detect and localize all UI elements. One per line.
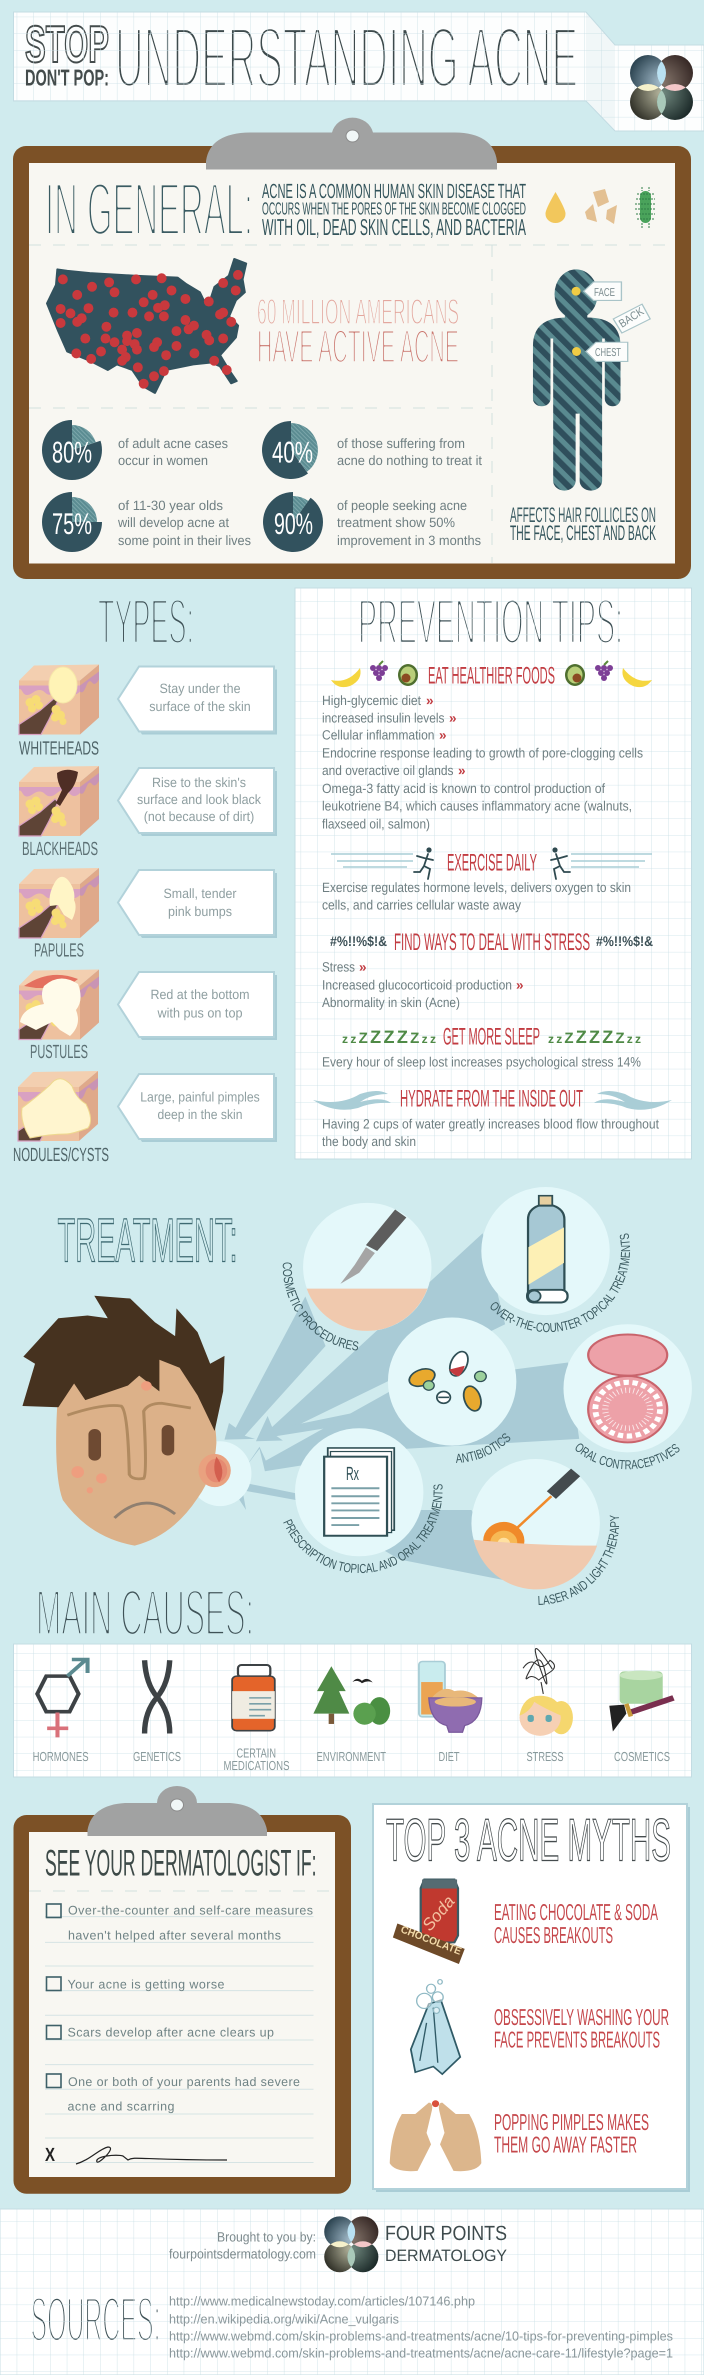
icon: banana right [622, 668, 652, 687]
type: pustules [19, 970, 99, 1063]
stat text: 90%: of people seeking acne [337, 498, 467, 513]
curved label: laser: LASER AND LIGHT THERAPY [538, 1515, 620, 1605]
stat pie: 80% [42, 420, 102, 480]
tip text: diet: and overactive oil glands [322, 763, 454, 778]
wave left [313, 1091, 391, 1110]
stat text: 75%: of 11-30 year olds [118, 498, 223, 513]
tip text: exercise: cells, and carries cellular waste away [322, 898, 521, 912]
icon: chocolate bar [393, 1923, 465, 1964]
source urls: http://www.webmd.com/skin-problems-and-treatments/acne/10-tips-for-preventing-pimples [169, 2328, 673, 2344]
title: stop: STOP [25, 16, 109, 74]
stat text: 75%: some point in their lives [118, 533, 251, 548]
callout: nodules/cysts [118, 1074, 277, 1142]
tip text: diet: » [426, 693, 434, 708]
type: papules: PAPULES [34, 940, 84, 962]
stat text: 90% [337, 498, 481, 548]
checklist text: acne and scarring [68, 2100, 175, 2114]
panel: in general clipboard: IN GENERAL: [45, 167, 253, 251]
clipboard clip [206, 118, 497, 170]
ruled lines [45, 1917, 314, 2162]
stat pie: 90%: 90% [274, 508, 313, 541]
callout: blackheads: surface and look black [137, 792, 261, 807]
dividers [29, 245, 675, 563]
icon: soda can [421, 1879, 458, 1942]
icon: environment [313, 1666, 390, 1725]
stat pie: 75%: 75% [52, 508, 92, 541]
stat text: 90%: improvement in 3 months [337, 533, 481, 548]
type: whiteheads [19, 664, 99, 760]
stat text: 80%: occur in women [118, 453, 208, 468]
tip text: diet: High-glycemic diet [322, 693, 421, 708]
stat text: 40% [337, 436, 482, 468]
type: whiteheads: WHITEHEADS [19, 738, 99, 760]
myth icons [390, 1879, 481, 2171]
figure: striped person [533, 269, 650, 491]
circle: prescription [295, 1428, 423, 1556]
icon: runner head left [426, 847, 432, 853]
icon: avocado left [398, 664, 418, 686]
stat text: 80%: of adult acne cases [118, 436, 228, 451]
icon: runner right [551, 854, 570, 879]
icon: genetics [145, 1660, 170, 1733]
icon: towel with bubbles [411, 1980, 460, 2074]
icon: hormones [37, 1660, 88, 1737]
type: nodules/cysts: NODULES/CYSTS [13, 1145, 109, 1166]
brand name: FOUR POINTS [385, 2222, 507, 2245]
icon: banana left [331, 668, 361, 687]
callout: pustules: with pus on top [157, 1006, 242, 1020]
text: TREATMENT: [58, 1207, 238, 1276]
stat pie: 40% [262, 421, 318, 479]
tip text: diet: » [439, 728, 447, 742]
credit text [169, 2230, 316, 2262]
callout: pustules: Red at the bottom [150, 987, 250, 1002]
stat pie: 80%: 80% [52, 436, 92, 470]
callout: blackheads: (not because of dirt) [144, 809, 254, 824]
signature: X [45, 2145, 55, 2166]
checklist text: Over-the-counter and self-care measures [68, 1904, 313, 1918]
icon: avocado right [565, 664, 585, 686]
circle: laser [471, 1459, 600, 1589]
curved label: oral contraceptives: ORAL CONTRACEPTIVES [576, 1444, 680, 1470]
curved label: cosmetic procedures: COSMETIC PROCEDURES [282, 1262, 358, 1350]
stat text: 75%: will develop acne at [117, 515, 229, 530]
header ribbon [14, 10, 704, 131]
logo: four points footer [324, 2216, 378, 2272]
panel: prevention tips: EXERCISE DAILY [447, 849, 537, 876]
tip text: diet: » [449, 710, 457, 726]
tip text: stress: » [516, 978, 524, 992]
intro text [262, 180, 526, 240]
callout: papules: Small, tender [164, 886, 237, 901]
tag labels [594, 287, 647, 359]
callout: papules [118, 870, 277, 938]
panel: main causes [14, 1644, 692, 1777]
callout: nodules/cysts: deep in the skin [158, 1107, 242, 1122]
callout: nodules/cysts: Large, painful pimples [140, 1090, 260, 1104]
icon: grapes left [370, 661, 388, 681]
checklist text: Your acne is getting worse [68, 1978, 225, 1992]
cause labels: HORMONES [33, 1749, 89, 1764]
icon: stress [519, 1649, 573, 1736]
arrows [224, 1233, 579, 1581]
map: usa with red dots [47, 259, 246, 393]
tip text: diet: leukotriene B4, which causes inflammatory acne (walnuts, [322, 798, 632, 814]
grawlix right: #%!!%$!& [596, 933, 653, 949]
treatment illustration [22, 1187, 692, 1589]
logo: four points [630, 55, 693, 120]
stat text: 80% [118, 436, 228, 468]
panel: in general clipboard: HAVE ACTIVE ACNE [257, 320, 459, 372]
spots [71, 1381, 152, 1493]
panel: prevention tips: GET MORE SLEEP [443, 1024, 540, 1050]
icon: oil drop [545, 192, 566, 223]
checklist text: Scars develop after acne clears up [68, 2026, 274, 2040]
callout: whiteheads: surface of the skin [149, 699, 251, 714]
panel: see your dermatologist clipboard: SEE YOUR DERMATOLOGIST IF: [45, 1843, 316, 1884]
checklist text: haven't helped after several months [68, 1928, 281, 1942]
panel: footer: SOURCES: [30, 2285, 160, 2355]
face head [56, 1348, 216, 1546]
eyes [88, 1425, 174, 1461]
credit text: Brought to you by: [217, 2230, 316, 2244]
sleep z's right: zzZZZZZzz [548, 1027, 641, 1047]
callout: blackheads: Rise to the skin's [152, 775, 246, 790]
icon: cosmetics [609, 1671, 674, 1731]
panel: see your dermatologist clipboard [14, 1786, 351, 2194]
icon: diet [419, 1661, 482, 1732]
brand name [385, 2222, 507, 2265]
checklist text: One or both of your parents had severe [68, 2075, 300, 2089]
callout: whiteheads [118, 666, 277, 734]
myth 2 text [494, 2004, 669, 2052]
checklist text [68, 1904, 313, 2114]
brows and nose [67, 1403, 191, 1479]
tip text: diet: » [458, 763, 466, 778]
icon: runner left [414, 854, 433, 879]
source urls: http://www.webmd.com/skin-problems-and-treatments/acne/acne-care-11/lifestyle?page=1 [169, 2346, 673, 2360]
panel: in general clipboard [13, 118, 691, 579]
type: pustules: PUSTULES [30, 1042, 88, 1063]
caption: affects hair follicles [510, 504, 656, 545]
prescription symbol: Rx [346, 1464, 359, 1485]
cause labels: GENETICS [133, 1749, 181, 1764]
panel: prevention tips [295, 586, 692, 1159]
type: blackheads: BLACKHEADS [22, 839, 98, 860]
cause labels: MEDICATIONS [224, 1758, 290, 1773]
icon: runner head right [552, 847, 558, 853]
circle: oral contraceptives [563, 1324, 692, 1452]
tip text: diet: Cellular inflammation [322, 728, 434, 742]
panel: footer [0, 2209, 704, 2375]
tip text: diet [322, 693, 643, 832]
tip text: diet: Omega-3 fatty acid is known to control production of [322, 781, 605, 796]
icon: dead skin flakes [585, 189, 617, 224]
chocolate label: CHOCOLATE [399, 1924, 463, 1958]
curved label: over the counter: OVER-THE-COUNTER TOPICAL TREATMENTS [490, 1234, 630, 1332]
inflamed pimple [198, 1454, 231, 1487]
tip text: diet: flaxseed oil, salmon) [322, 816, 430, 832]
stat pie: 90% [263, 492, 323, 552]
myth 1 text [494, 1899, 658, 1948]
curved label: prescription: PRESCRIPTION TOPICAL AND ORAL TREATMENTS [283, 1484, 443, 1574]
type: papules [19, 868, 99, 962]
type: nodules/cysts [13, 1071, 109, 1166]
panel: in general clipboard: 60 MILLION AMERICANS [257, 291, 459, 332]
stat text: 90%: treatment show 50% [337, 515, 455, 530]
stat text: 40%: of those suffering from [337, 436, 465, 451]
speed lines [331, 854, 652, 867]
source urls: http://en.wikipedia.org/wiki/Acne_vulgaris [169, 2312, 399, 2326]
cause labels: DIET [438, 1749, 460, 1764]
tip text: stress: Stress [322, 960, 355, 974]
stat text: 40%: acne do nothing to treat it [337, 453, 482, 468]
source urls: http://www.medicalnewstoday.com/articles/107146.php [169, 2294, 475, 2308]
tip text: diet: increased insulin levels [322, 710, 445, 726]
icon: bacteria [635, 187, 656, 228]
signature [45, 2145, 227, 2166]
tip text: hydrate: Having 2 cups of water greatly increases blood flow throughout [322, 1116, 659, 1132]
tag labels: CHEST [595, 347, 621, 359]
type: blackheads [19, 766, 99, 860]
myth 3 text [494, 2109, 649, 2158]
callout: whiteheads: Stay under the [160, 681, 240, 696]
source urls [169, 2294, 673, 2360]
text: TYPES: [98, 586, 194, 658]
stat pie: 40%: 40% [272, 436, 313, 470]
tip text: sleep: Every hour of sleep lost increases psychological stress 14% [322, 1054, 641, 1070]
circle: cosmetic procedures [303, 1203, 431, 1331]
subtitle: don't pop: DON'T POP: [25, 64, 109, 90]
curved label: antibiotics: ANTIBIOTICS [456, 1433, 510, 1463]
stat: 60 million americans [257, 291, 459, 372]
callout: pustules [118, 972, 277, 1040]
callout: papules: pink bumps [168, 904, 232, 919]
checkboxes [46, 1904, 61, 2088]
icon: grapes right [595, 661, 613, 681]
clipboard clip [88, 1786, 267, 1836]
cause labels: COSMETICS [614, 1749, 670, 1764]
wave right [594, 1091, 672, 1110]
frown [114, 1503, 175, 1518]
tip text: exercise: Exercise regulates hormone levels, delivers oxygen to skin [322, 880, 631, 895]
tip text: stress: » [359, 960, 367, 974]
tip text: stress: Increased glucocorticoid production [322, 978, 512, 992]
soda label: Soda [419, 1892, 459, 1935]
stat pie: 75% [42, 492, 102, 552]
tip text: hydrate [322, 1116, 659, 1149]
tip text: exercise [322, 880, 631, 912]
icon: certain medications [232, 1665, 275, 1731]
panel: top 3 acne myths [373, 1804, 690, 2192]
cause icons [37, 1649, 674, 1737]
cause labels: CERTAIN [236, 1746, 276, 1760]
tag labels: FACE [594, 287, 615, 299]
circle: over the counter [481, 1187, 610, 1315]
callout: blackheads [118, 768, 277, 836]
cause labels: ENVIRONMENT [316, 1749, 386, 1764]
panel: prevention tips: EAT HEALTHIER FOODS [428, 663, 555, 690]
brand name: DERMATOLOGY [385, 2247, 507, 2265]
tip text: stress [322, 960, 524, 1010]
icon: popping hands [390, 2100, 481, 2171]
sleep z's left: zzZZZZZzz [342, 1027, 436, 1047]
text: MAIN CAUSES: [36, 1576, 254, 1649]
cause labels [33, 1746, 670, 1773]
credit text: fourpointsdermatology.com [169, 2246, 316, 2262]
cause labels: STRESS [526, 1749, 564, 1764]
tip text: stress: Abnormality in skin (Acne) [322, 995, 460, 1010]
tip text: diet: Endocrine response leading to growth of pore-clogging cells [322, 746, 643, 760]
circle: antibiotics [388, 1317, 516, 1446]
tag labels: BACK [617, 306, 647, 331]
stat text: 75% [117, 498, 251, 548]
fold shading [586, 12, 615, 131]
hair [22, 1296, 225, 1431]
grawlix left: #%!!%$!& [330, 933, 387, 949]
tip text: hydrate: the body and skin [322, 1134, 416, 1149]
pimple glow [189, 1441, 251, 1506]
